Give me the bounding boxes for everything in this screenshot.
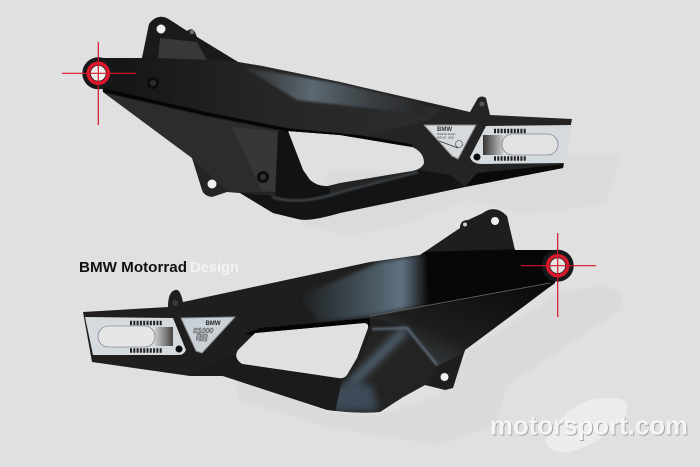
beam bbox=[102, 57, 356, 138]
shadow of lower swingarm bbox=[235, 285, 624, 445]
streak near pivot bbox=[370, 283, 550, 316]
lower bolts and lugs bbox=[172, 217, 499, 381]
upper slotted plate bbox=[470, 125, 572, 164]
upper data label: 0000 00 · 0000 bbox=[437, 136, 454, 140]
watermark: motorsport.com bbox=[490, 398, 689, 452]
title: BMW Motorrad bbox=[79, 260, 187, 276]
blue highlight facet bbox=[300, 254, 428, 322]
lower arm body bbox=[83, 209, 555, 413]
watermark: motorsport.com: motorsport.com bbox=[490, 410, 688, 440]
blue right lower edge bbox=[325, 380, 378, 412]
upper pivot bearing bbox=[82, 57, 114, 89]
rim above hole bbox=[245, 318, 370, 336]
upper arm body bbox=[102, 16, 572, 220]
upper red crosshair bbox=[62, 42, 136, 125]
beam bbox=[420, 249, 555, 307]
gusset recess bbox=[158, 38, 207, 60]
lower pivot bearing bbox=[542, 250, 574, 282]
blue highlight facet bbox=[248, 68, 406, 111]
lower swingarm bbox=[70, 200, 596, 420]
lower model badge: BMW bbox=[206, 321, 221, 327]
tail wedge bbox=[465, 164, 566, 187]
column left of hole bbox=[276, 131, 330, 204]
lower model badge: Design bbox=[198, 338, 208, 342]
logo swoosh bbox=[545, 398, 627, 452]
lower model badge: RR bbox=[196, 333, 208, 342]
title bbox=[79, 260, 239, 276]
gusset upper body bbox=[142, 17, 238, 62]
upper swingarm bbox=[62, 16, 572, 220]
lower rail highlight bbox=[272, 172, 418, 201]
upper arm shading bbox=[100, 17, 566, 222]
lower gusset panel bbox=[104, 93, 192, 158]
lower arm shading bbox=[223, 249, 555, 413]
crest highlight bbox=[372, 328, 437, 365]
upper data label: BMW bbox=[437, 127, 452, 133]
lower rail bbox=[240, 170, 465, 222]
upper bolts and lugs bbox=[147, 24, 484, 188]
lower model badge: S1000 bbox=[193, 328, 213, 335]
lower rail dark bbox=[223, 358, 342, 411]
shadow of upper swingarm bbox=[300, 153, 620, 236]
blue facet edge bbox=[350, 330, 405, 385]
facet bbox=[232, 127, 278, 192]
lower model badge bbox=[181, 317, 235, 353]
watermark: motorsport.com: motorsport.com bbox=[491, 412, 689, 442]
upper data label: Motorrad Design bbox=[437, 133, 456, 136]
lower red crosshair bbox=[521, 233, 596, 317]
facet below pivot bbox=[370, 284, 552, 366]
black shadow line bbox=[103, 90, 412, 146]
lower slotted plate bbox=[85, 317, 186, 355]
left lower facet bbox=[340, 385, 426, 413]
title: Design bbox=[190, 260, 239, 276]
upper data label bbox=[424, 125, 476, 159]
